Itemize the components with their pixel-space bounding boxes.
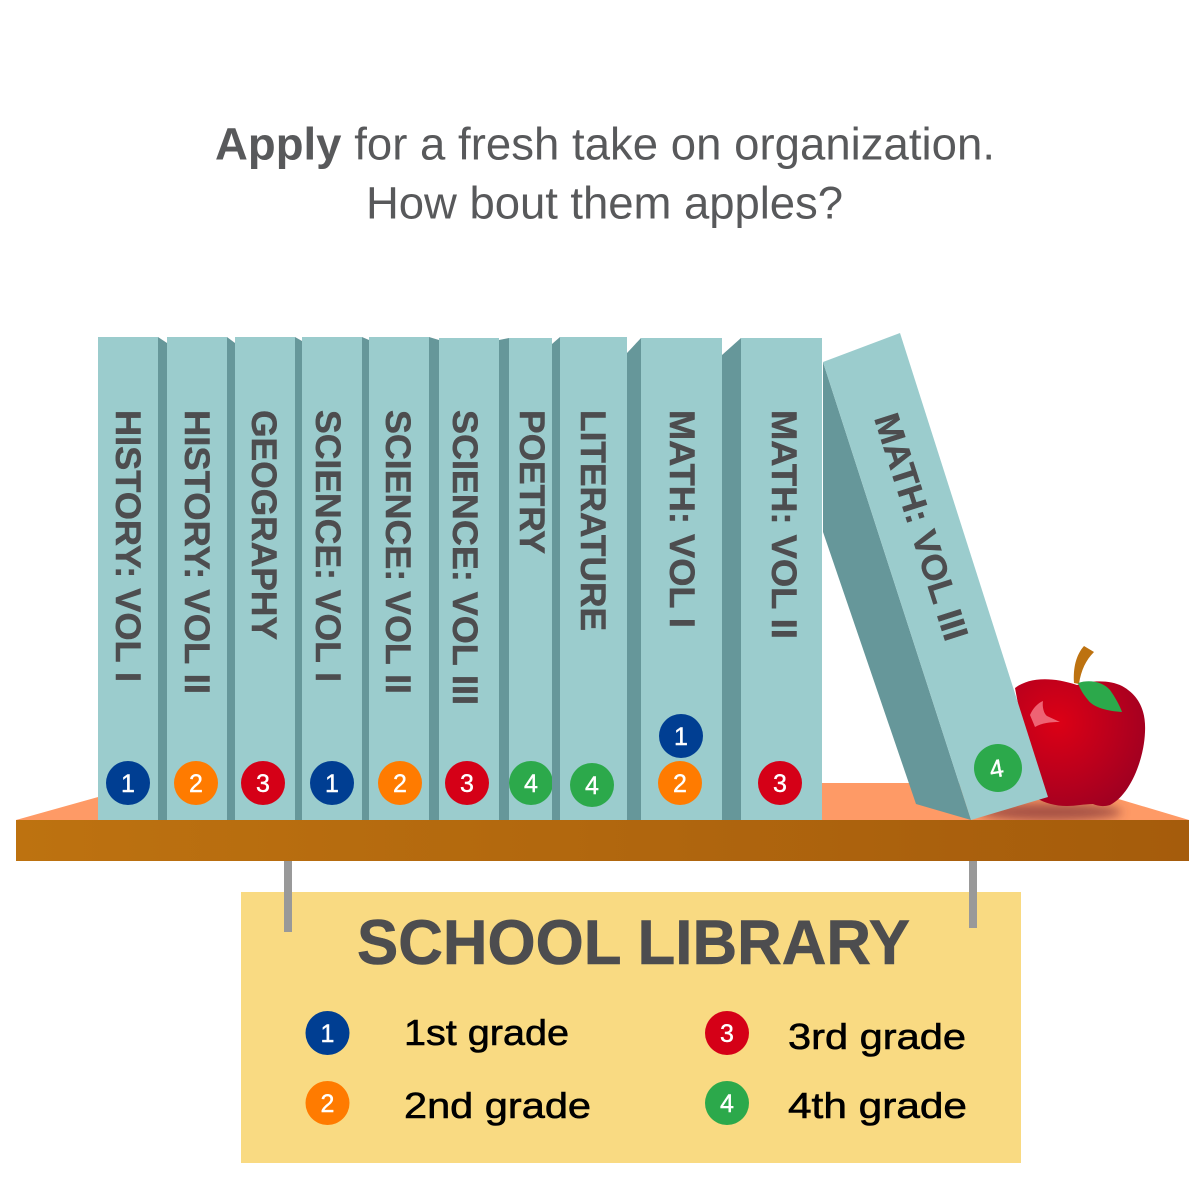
legend: 2nd grade: [306, 1081, 591, 1126]
legend: 4th grade: 4: [720, 1090, 734, 1118]
badge: 1: [106, 761, 150, 805]
badge: 2: [658, 761, 702, 805]
book: science vol i: [302, 337, 369, 820]
badge: 1: 1: [674, 723, 688, 751]
badge: 4: 4: [585, 772, 599, 800]
book: math vol i: [627, 338, 722, 820]
badge: 3: 3: [460, 770, 474, 798]
book: math vol ii: [722, 338, 822, 820]
badge: 3: 3: [256, 770, 270, 798]
book: math vol ii: MATH: VOL II: [764, 410, 803, 639]
legend: 4th grade: 4th grade: [788, 1085, 967, 1126]
sign heading: SCHOOL LIBRARY: [357, 908, 910, 978]
badge: 3: [445, 761, 489, 805]
book: geography: [235, 337, 302, 820]
hanging post: right: [969, 855, 977, 928]
legend: 4th grade: [705, 1081, 967, 1126]
book: geography: GEOGRAPHY: [244, 410, 283, 640]
sign: school library: [241, 892, 1021, 1163]
title: [215, 118, 995, 228]
badge: 4: [509, 761, 553, 805]
book: math vol iii leaning: MATH: VOL III: [866, 409, 975, 645]
legend: 2nd grade: 2nd grade: [404, 1085, 591, 1126]
book: math vol i: MATH: VOL I: [662, 410, 701, 628]
legend: 3rd grade: [705, 1011, 966, 1057]
book: science vol i: SCIENCE: VOL I: [308, 410, 347, 682]
badge: 2: 2: [673, 770, 687, 798]
shelf: [16, 783, 1189, 861]
book: poetry: [509, 338, 553, 820]
badge: 3: 3: [773, 770, 787, 798]
legend: 1st grade: [306, 1011, 569, 1055]
book: science vol ii: SCIENCE: VOL II: [378, 410, 417, 694]
icon: apple: [1015, 646, 1145, 806]
legend: 1st grade: 1st grade: [404, 1012, 569, 1053]
badge: 2: [378, 761, 422, 805]
badge: 2: 2: [393, 770, 407, 798]
badge: 2: [174, 761, 218, 805]
badge: 1: 1: [121, 770, 135, 798]
book: science vol iii: [439, 338, 509, 820]
book: literature: [552, 337, 627, 820]
legend: 3rd grade: 3: [720, 1020, 734, 1048]
hanging post: left: [284, 855, 292, 932]
book: science vol ii: [369, 337, 439, 820]
book: poetry: POETRY: [512, 410, 551, 554]
legend: 2nd grade: 2: [321, 1090, 334, 1118]
badge: 2: 2: [189, 770, 203, 798]
book: history vol ii: HISTORY: VOL II: [177, 410, 216, 694]
badge: 3: [241, 761, 285, 805]
book: math vol iii leaning: [823, 333, 1048, 820]
badge: 4: 4: [987, 754, 1006, 784]
badge: 4: 4: [524, 770, 538, 798]
book: history vol i: [98, 337, 167, 820]
legend: 3rd grade: 3rd grade: [788, 1016, 966, 1057]
apple shadow: [978, 803, 1122, 821]
badge: 4: [570, 763, 614, 807]
badge: 1: 1: [325, 770, 339, 798]
title: How bout them apples?: [366, 178, 843, 228]
badge: 4: [974, 744, 1022, 792]
badge: 3: [758, 761, 802, 805]
book: literature: LITERATURE: [573, 410, 612, 631]
badge: 1: [659, 714, 703, 758]
badge: 1: [310, 761, 354, 805]
book: science vol iii: SCIENCE: VOL III: [445, 410, 484, 705]
legend: 1st grade: 1: [321, 1020, 334, 1048]
book: history vol ii: [167, 337, 235, 820]
book: history vol i: HISTORY: VOL I: [108, 410, 147, 682]
title: Apply for a fresh take on organization.: [215, 118, 995, 170]
